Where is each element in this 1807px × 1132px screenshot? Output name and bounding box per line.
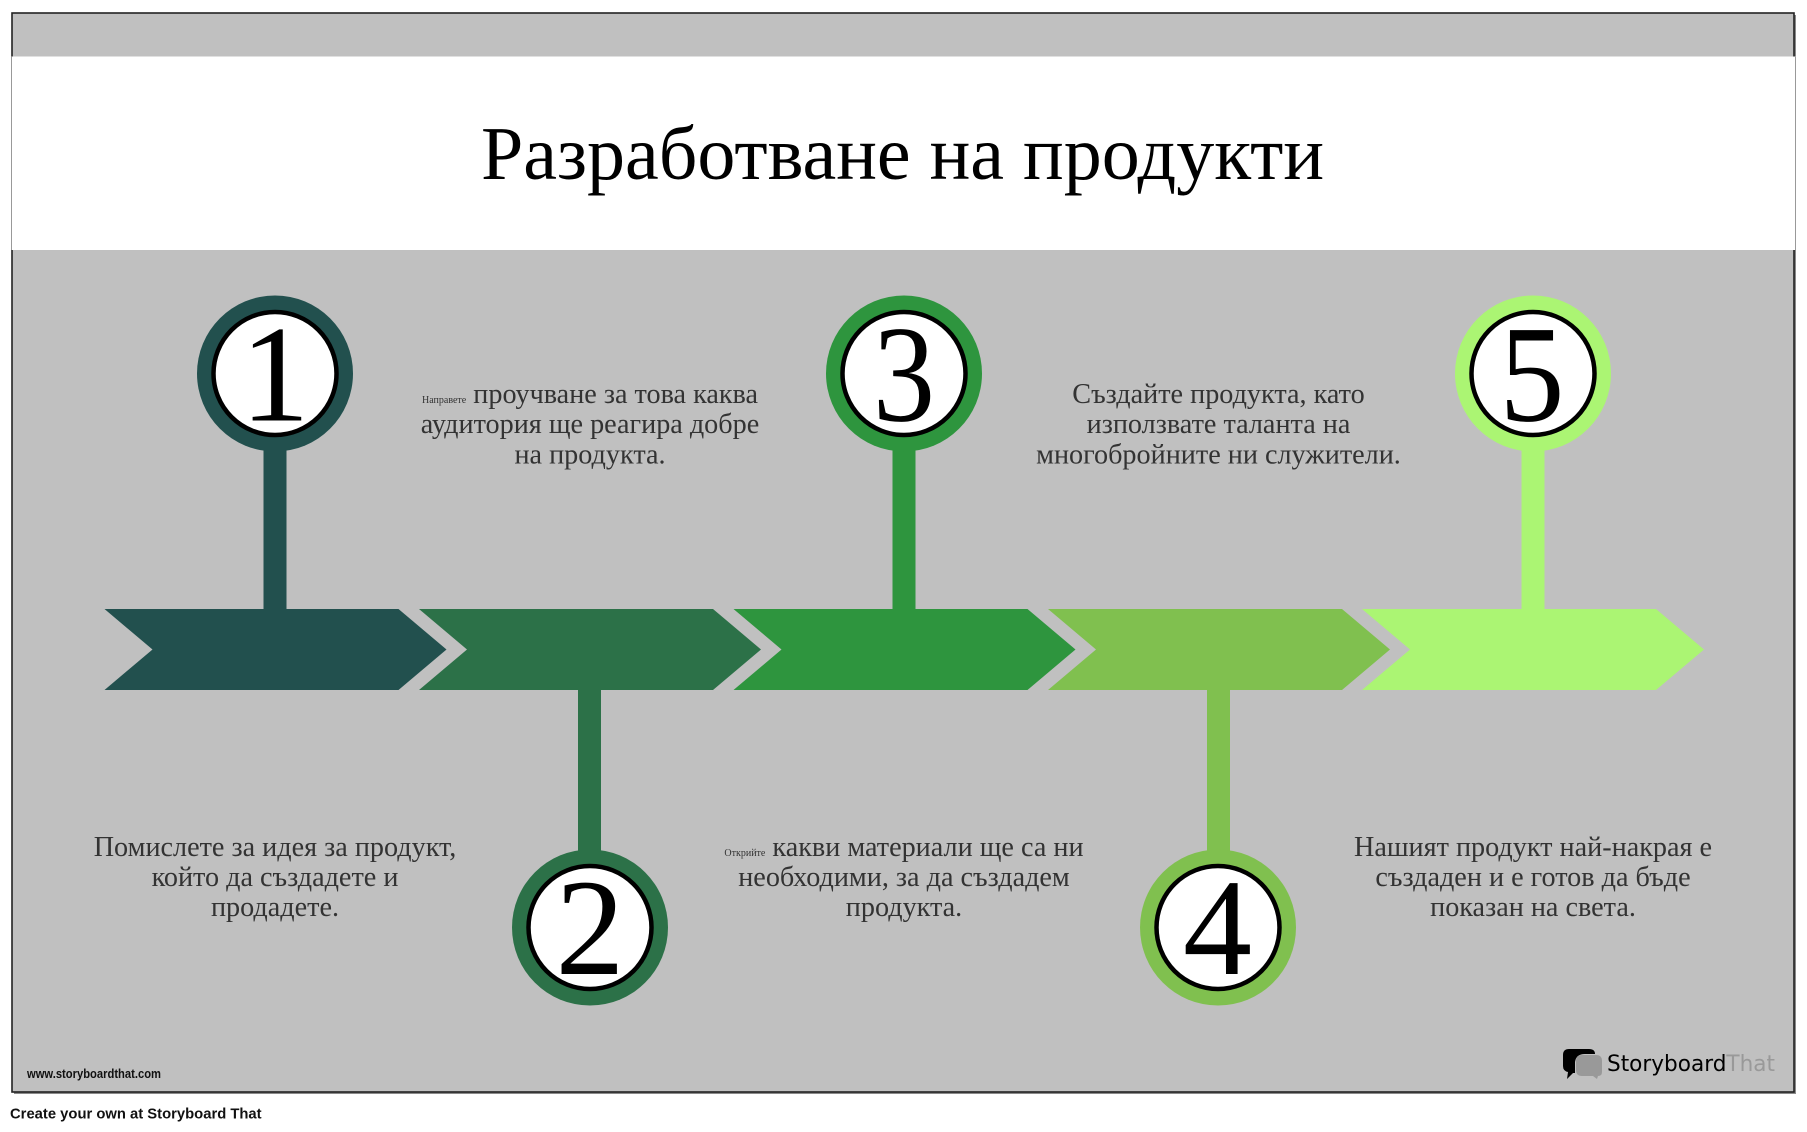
- step 2: [419, 609, 761, 1006]
- text: step 1 description: [94, 832, 456, 923]
- text: step 1 description: Помислете за идея за продукт,: [94, 832, 456, 863]
- step 4 chevron: [1048, 609, 1390, 690]
- logo: Storyboard That: [1563, 1049, 1775, 1079]
- text: step 5 description: [1354, 832, 1712, 923]
- logo wordmark: StoryboardThat: [1607, 1052, 1775, 1077]
- step 2 number badge: [512, 850, 668, 1006]
- text: step 2 description: на продукта.: [514, 440, 666, 470]
- website url: www.storyboardthat.com: [26, 1066, 161, 1081]
- text: step 5 description: показан на света.: [1430, 892, 1636, 923]
- text: step 5 description: Нашият продукт най-накрая е: [1354, 832, 1712, 863]
- step 3: [734, 296, 1076, 690]
- text: step 3 description: Открийте какви материали ще са ни: [724, 832, 1084, 863]
- step 3 chevron: [734, 609, 1076, 690]
- step 2 number badge: 2: [556, 851, 624, 1004]
- text: step 1 description: продадете.: [211, 892, 339, 923]
- step 4: [1048, 609, 1390, 1006]
- text: step 1 description: който да създадете и: [152, 862, 398, 893]
- text: step 4 description: Създайте продукта, като: [1072, 379, 1365, 410]
- text: step 3 description: продукта.: [846, 892, 962, 923]
- text: step 3 description: необходими, за да създадем: [738, 862, 1070, 893]
- title band: [11, 56, 1796, 250]
- text: step 2 description: [421, 379, 759, 470]
- step 4 number badge: 4: [1183, 851, 1252, 1004]
- step 5 number badge: 5: [1500, 298, 1564, 450]
- step 2 stem: [578, 689, 601, 854]
- footer credit: Create your own at Storyboard That: [10, 1106, 262, 1122]
- step 4 stem: [1207, 689, 1230, 854]
- title: Разработване на продукти: [481, 112, 1324, 196]
- text: step 2 description: аудитория ще реагира добре: [421, 409, 759, 440]
- text: step 3 description: [724, 832, 1084, 923]
- step 2 chevron: [419, 609, 761, 690]
- step 5 chevron: [1362, 609, 1704, 690]
- step 5 number badge: [1455, 296, 1611, 452]
- step 4 number badge: [1140, 850, 1296, 1006]
- text: step 4 description: многобройните ни служители.: [1036, 440, 1401, 470]
- step 1 number badge: [197, 296, 353, 452]
- step 1 number badge: 1: [240, 298, 310, 450]
- step 3 number badge: [826, 296, 982, 452]
- step 5 stem: [1522, 445, 1544, 610]
- step 5: [1362, 296, 1704, 690]
- text: step 5 description: създаден и е готов да бъде: [1375, 862, 1691, 893]
- step 3 number badge: 3: [873, 299, 935, 451]
- text: step 4 description: използвате таланта на: [1087, 409, 1351, 440]
- text: step 2 description: Направете проучване за това каква: [422, 379, 758, 410]
- step 1 stem: [264, 445, 286, 610]
- text: step 4 description: [1036, 379, 1401, 470]
- step 3 stem: [892, 445, 916, 610]
- step 1: [104, 296, 446, 690]
- icon: speech bubbles: [1563, 1049, 1602, 1079]
- step 1 chevron: [104, 609, 446, 690]
